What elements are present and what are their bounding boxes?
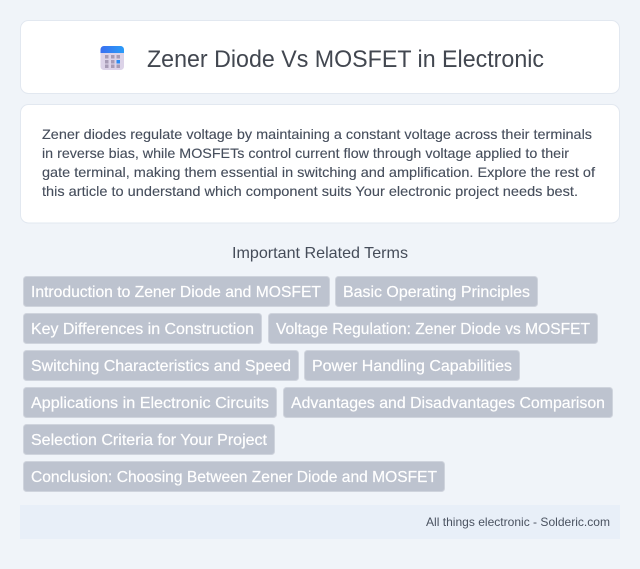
header panel: [20, 20, 620, 94]
intro text: Zener diodes regulate voltage by maintaining a constant voltage across their terminals: [42, 126, 592, 142]
tag: [24, 462, 444, 492]
tag: [268, 314, 598, 344]
intro text: in reverse bias, while MOSFETs control current flow through voltage applied to their: [42, 145, 569, 161]
heading: important related terms: Important Related Terms: [232, 245, 408, 262]
intro text: gate terminal, making them essential in switching and amplification. Explore the rest of: [42, 164, 595, 180]
tag: Basic Operating Principles: [343, 284, 530, 301]
footer text: All things electronic - Solderic.com: [426, 515, 610, 529]
tag: [304, 350, 520, 380]
intro text: this article to understand which component suits Your electronic project needs best.: [42, 183, 578, 199]
tag: [336, 276, 538, 306]
tag: [284, 388, 612, 418]
footer bar: [20, 505, 620, 539]
tag: Key Differences in Construction: [31, 321, 254, 338]
tag: [24, 424, 274, 454]
tag: Applications in Electronic Circuits: [31, 395, 269, 412]
intro text: [42, 126, 595, 199]
tag: Conclusion: Choosing Between Zener Diode and MOSFET: [31, 469, 437, 486]
tag: [24, 314, 262, 344]
tag: [24, 276, 330, 306]
title: Zener Diode Vs MOSFET in Electronic: [147, 46, 544, 73]
tag: Advantages and Disadvantages Comparison: [291, 395, 605, 412]
tag: [24, 388, 276, 418]
tag: [24, 350, 298, 380]
tag: Selection Criteria for Your Project: [31, 432, 268, 449]
icon: calendar: [100, 46, 124, 70]
tag: Introduction to Zener Diode and MOSFET: [31, 284, 321, 301]
tag: Power Handling Capabilities: [312, 358, 512, 375]
intro panel: [20, 104, 620, 223]
related terms tags: [24, 276, 612, 492]
tag: Switching Characteristics and Speed: [31, 358, 291, 375]
tag: Voltage Regulation: Zener Diode vs MOSFET: [276, 321, 590, 338]
